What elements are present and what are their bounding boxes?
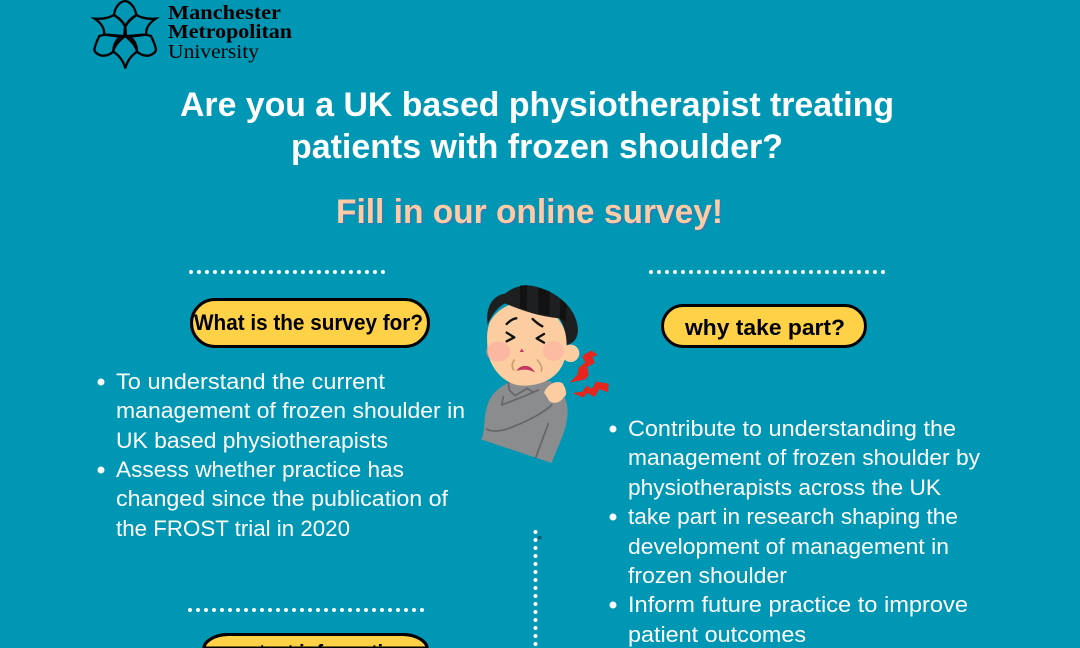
subtitle: call to action: Fill in our online survey! [336, 193, 723, 231]
bullet list: reasons to take part: frozen shoulder [628, 563, 787, 588]
pill heading: What is the survey for?: What is the survey for? [194, 310, 423, 335]
ear [562, 345, 579, 362]
logo wordmark: Metropolitan [168, 22, 292, 43]
hair [487, 285, 578, 345]
cheeks [486, 342, 510, 362]
bullet list: reasons to take part: patient outcomes [628, 622, 806, 647]
bullet list: reasons to take part [610, 416, 980, 647]
bullet list: survey purpose: management of frozen shoulder in [116, 398, 465, 423]
logo wordmark: Manchester [168, 3, 281, 24]
logo wordmark [168, 3, 292, 63]
bullet list: survey purpose: UK based physiotherapists [116, 428, 388, 453]
face features [507, 318, 544, 343]
bullet list: reasons to take part: take part in research shaping the [628, 504, 958, 529]
panel: why take part [610, 272, 980, 647]
hand [544, 382, 566, 403]
title: Are you a UK based physiotherapist treating [180, 86, 894, 124]
bullet list: reasons to take part: Inform future practice to improve [628, 592, 968, 617]
head [487, 302, 567, 386]
bullet list: survey purpose: the FROST trial in 2020 [116, 516, 350, 541]
panel: contact information [190, 610, 427, 648]
icon: university trefoil emblem [94, 1, 156, 68]
bullet list: survey purpose: Assess whether practice has [116, 457, 404, 482]
bullet list: reasons to take part: physiotherapists across the UK [628, 475, 941, 500]
vertical dotted divider [536, 532, 542, 646]
bullet list: reasons to take part: Contribute to understanding the [628, 416, 956, 441]
logo: Manchester Metropolitan University [94, 1, 292, 68]
illustration: man with shoulder pain [481, 285, 609, 463]
body [481, 381, 568, 463]
pain marks [569, 350, 598, 383]
subtitle: call to action: Fill in our online survey! [338, 194, 724, 232]
title: patients with frozen shoulder? [291, 128, 783, 166]
panel: what is the survey for [98, 272, 465, 541]
title [180, 86, 894, 166]
bullet list: reasons to take part: management of frozen shoulder by [628, 445, 980, 470]
bullet list: survey purpose [98, 369, 465, 541]
bullet list: survey purpose: changed since the publication of [116, 486, 449, 511]
pill heading: What is the survey for? [192, 300, 428, 346]
bullet list: survey purpose: To understand the current [116, 369, 385, 394]
pill heading: why take part?: why take part? [684, 315, 845, 340]
pill heading: why take part? [662, 306, 866, 346]
bullet list: reasons to take part: development of management in [628, 534, 949, 559]
logo wordmark: University [168, 42, 259, 63]
pill heading: contact information (cropped at page edge) [204, 634, 427, 648]
